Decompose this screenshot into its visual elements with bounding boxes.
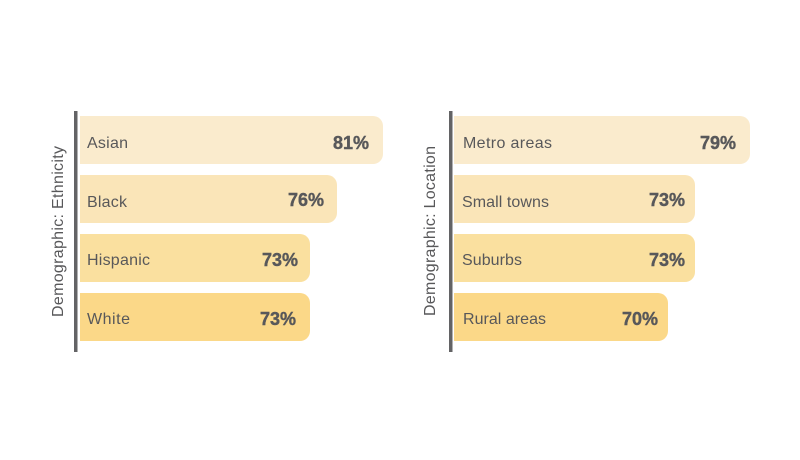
- bar: Hispanic: [80, 234, 310, 282]
- axis line: location: [449, 111, 452, 352]
- axis title: location: Demographic: Location: [422, 146, 439, 316]
- panel: location chart: [422, 111, 750, 352]
- bar: White: 73%: [260, 309, 296, 329]
- bar: White: [80, 293, 310, 341]
- bar: Small towns: [454, 175, 695, 223]
- bar: Suburbs: Suburbs: [462, 252, 522, 269]
- bar: Black: Black: [87, 194, 128, 211]
- bar: Asian: [80, 116, 383, 164]
- bar: Rural areas: Rural areas: [463, 311, 546, 328]
- bar: Metro areas: [454, 116, 750, 164]
- axis line: ethnicity: [74, 111, 78, 352]
- bar: Asian: Asian: [87, 135, 128, 152]
- bar: Black: 76%: [288, 190, 324, 210]
- bar: Black: [80, 175, 337, 223]
- bar: Suburbs: 73%: [649, 250, 685, 270]
- bar: Hispanic: Hispanic: [87, 252, 150, 269]
- bar: Rural areas: [454, 293, 668, 341]
- bar: Metro areas: 79%: [700, 133, 736, 153]
- bar: Small towns: Small towns: [462, 194, 549, 211]
- bar: Rural areas: 70%: [622, 309, 658, 329]
- bar: Hispanic: 73%: [262, 250, 298, 270]
- panel: ethnicity chart: [50, 111, 383, 352]
- bar: Suburbs: [454, 234, 695, 282]
- bar: Metro areas: Metro areas: [463, 135, 552, 152]
- axis title: ethnicity: Demographic: Ethnicity: [50, 146, 67, 317]
- bar: White: White: [87, 311, 130, 328]
- bar: Asian: 81%: [333, 133, 369, 153]
- bar: Small towns: 73%: [649, 190, 685, 210]
